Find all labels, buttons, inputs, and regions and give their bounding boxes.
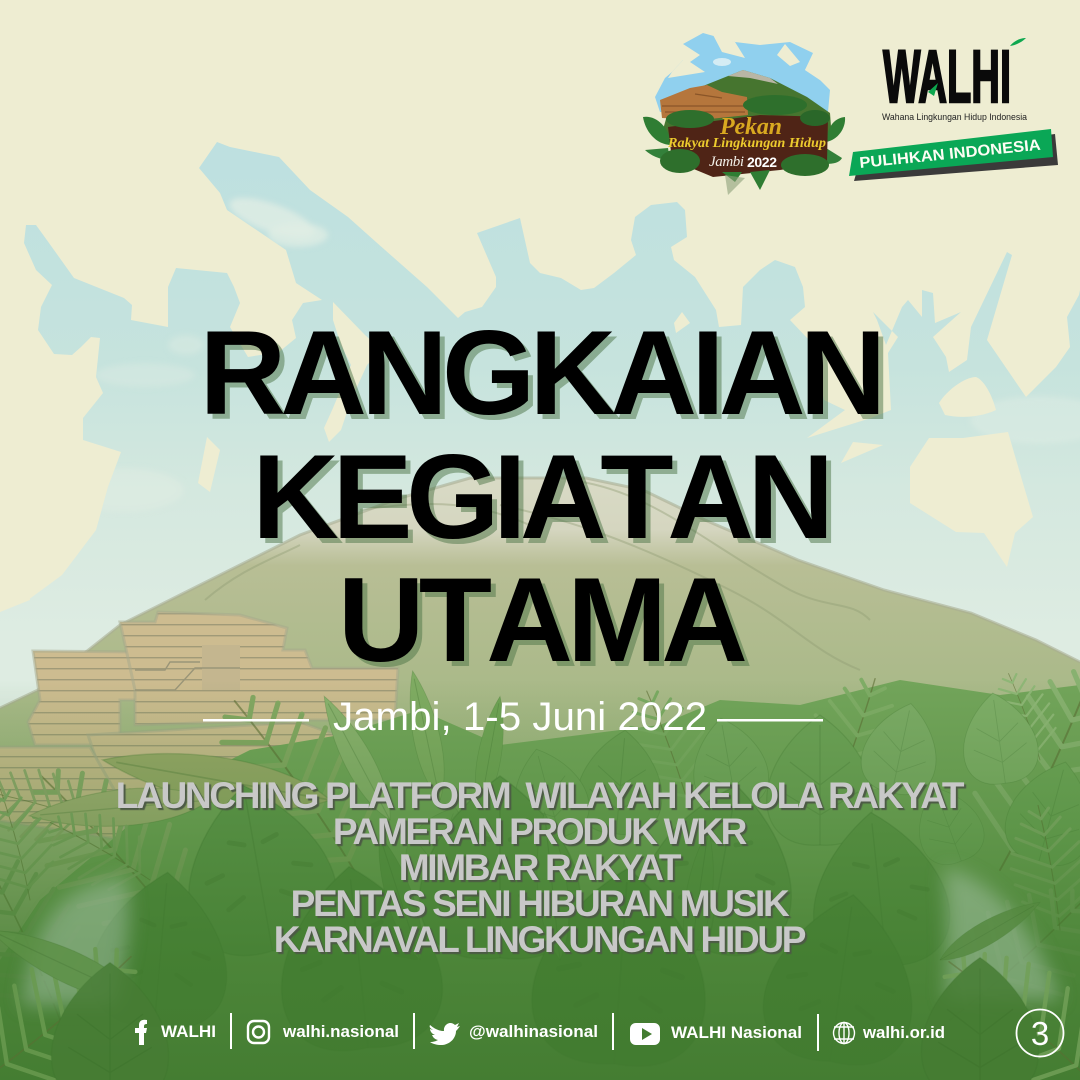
event 5: KARNAVAL LINGKUNGAN HIDUP <box>274 919 804 960</box>
instagram handle: walhi.nasional <box>282 1022 399 1041</box>
event logo: Pekan Rakyat Lingkungan Hidup: Jambi <box>709 154 744 170</box>
icon: youtube <box>630 1023 660 1045</box>
WALHI logo: Wahana Lingkungan Hidup Indonesia <box>882 112 1028 123</box>
icon: facebook <box>135 1020 147 1045</box>
icon: instagram <box>248 1021 269 1043</box>
event logo: Pekan Rakyat Lingkungan Hidup: Rakyat Lingkungan Hidup <box>667 136 826 151</box>
twitter handle: @walhinasional <box>469 1022 598 1041</box>
event logo: Pekan Rakyat Lingkungan Hidup: 2022 <box>747 154 777 170</box>
facebook handle: WALHI <box>161 1022 216 1041</box>
green fade over lower page <box>0 680 1080 1080</box>
date rule right <box>717 719 823 722</box>
date rule left <box>203 719 309 722</box>
event logo: Pekan Rakyat Lingkungan Hidup <box>643 33 845 195</box>
lower fronds over waterfalls <box>0 892 1080 1080</box>
youtube handle: WALHI Nasional <box>671 1023 802 1042</box>
icon: website globe <box>834 1022 854 1044</box>
sky silhouette of crowd <box>0 142 1080 720</box>
footer social links <box>135 1013 945 1051</box>
WALHI logo <box>882 35 1028 123</box>
event 1: LAUNCHING PLATFORM WILAYAH KELOLA RAKYAT <box>116 775 962 816</box>
tropical foliage <box>0 645 1080 1080</box>
event logo: Pekan Rakyat Lingkungan Hidup: Pekan <box>719 114 782 140</box>
title line 2: KEGIATAN <box>252 430 828 564</box>
event 4: PENTAS SENI HIBURAN MUSIK <box>291 883 787 924</box>
icon: twitter <box>430 1023 460 1045</box>
event 2: PAMERAN PRODUK WKR <box>333 811 745 852</box>
title line 3: UTAMA <box>338 553 742 687</box>
waterfalls <box>22 868 1060 1005</box>
temple of stacked stone <box>0 612 398 840</box>
date and location: Jambi, 1-5 Juni 2022 <box>333 694 707 739</box>
page number badge <box>1016 1010 1064 1056</box>
mountain <box>0 478 1080 1080</box>
website address: walhi.or.id <box>862 1023 945 1042</box>
event 3: MIMBAR RAKYAT <box>399 847 679 888</box>
page number badge: 3 <box>1031 1015 1049 1052</box>
banner: Pulihkan Indonesia: PULIHKAN INDONESIA <box>859 137 1041 172</box>
banner: Pulihkan Indonesia <box>849 129 1058 181</box>
list of main events <box>116 775 1022 1049</box>
title line 1: RANGKAIAN <box>199 306 881 440</box>
